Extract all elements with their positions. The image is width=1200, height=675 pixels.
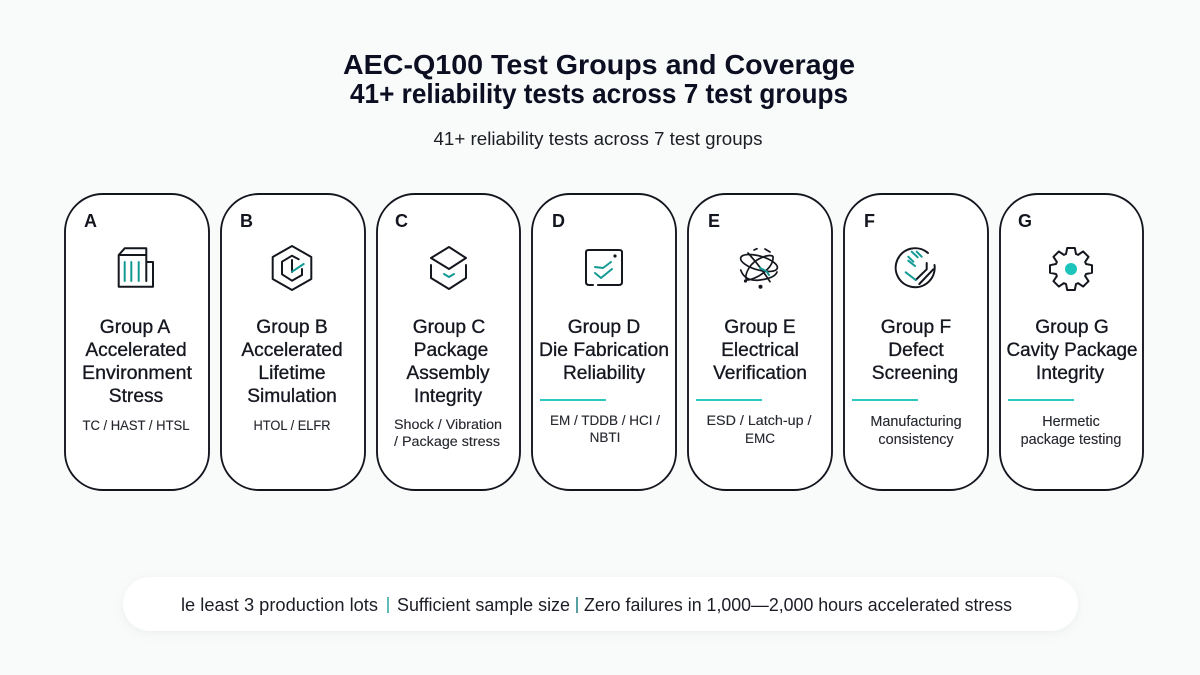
- badge letter E: E: [708, 211, 720, 231]
- heading: group B: Lifetime: [258, 363, 326, 384]
- tests: group G: [1021, 414, 1121, 448]
- title: [343, 49, 855, 109]
- tests: group D: NBTI: [590, 430, 620, 445]
- subtitle: 41+ reliability tests across 7 test groups: [434, 129, 762, 149]
- heading: group B: Simulation: [247, 386, 337, 407]
- tests: group E: EMC: [745, 431, 775, 446]
- heading: group B: Accelerated: [241, 340, 343, 361]
- panel: group G: [1000, 194, 1143, 490]
- icon: circled checks F: [896, 248, 935, 287]
- heading: group B: Group B: [256, 317, 328, 338]
- heading: group D: [539, 317, 669, 384]
- tests: group C: Shock / Vibration: [394, 417, 502, 432]
- icon: hexagon clock B: [273, 246, 311, 290]
- heading: group F: [872, 317, 958, 384]
- panel: group A: [65, 194, 209, 490]
- callout: qualification criteria: Zero failures in 1,000—2,000 hours accelerated stress: [584, 595, 1012, 615]
- callout: qualification criteria: Sufficient sample size: [397, 595, 570, 615]
- heading: group A: Accelerated: [85, 340, 187, 361]
- heading: group B: [241, 317, 343, 407]
- badge letter B: B: [240, 211, 253, 231]
- panel: group D: [532, 194, 676, 490]
- tests: group C: / Package stress: [394, 434, 500, 449]
- badge letter F: F: [864, 211, 875, 231]
- heading: group C: Assembly: [406, 363, 490, 384]
- badge letter G: G: [1018, 211, 1032, 231]
- heading: group D: Reliability: [563, 363, 645, 384]
- icon: gear G: [1050, 248, 1092, 290]
- heading: group G: [1006, 317, 1138, 384]
- heading: group C: Package: [414, 340, 488, 361]
- panel: group E: [688, 194, 832, 490]
- tests: group F: consistency: [878, 432, 954, 448]
- badge letter C: C: [395, 211, 408, 231]
- tests: group B: HTOL / ELFR: [254, 418, 331, 433]
- divider: group F: [852, 399, 918, 401]
- icon: checklist square D: [586, 250, 622, 285]
- heading: group A: Group A: [100, 317, 170, 338]
- icon: atom E: [739, 249, 779, 289]
- heading: group E: Electrical: [721, 340, 799, 361]
- tests: group A: TC / HAST / HTSL: [82, 418, 190, 433]
- heading: group A: Stress: [109, 386, 163, 407]
- heading: group E: Verification: [713, 363, 807, 384]
- tests: group D: [550, 413, 660, 445]
- divider: group E: [696, 399, 762, 401]
- heading: group A: [82, 317, 193, 407]
- heading: group F: Defect: [888, 340, 944, 361]
- tests: group G: Hermetic: [1042, 414, 1100, 430]
- heading: group E: Group E: [724, 317, 796, 338]
- heading: group G: Cavity Package: [1006, 340, 1138, 361]
- tests: group D: EM / TDDB / HCI /: [550, 413, 660, 428]
- heading: group A: Environment: [82, 363, 193, 384]
- divider: group D: [540, 399, 606, 401]
- heading: group F: Screening: [872, 363, 958, 384]
- heading: group C: Integrity: [414, 386, 483, 407]
- tests: group G: package testing: [1021, 432, 1121, 448]
- callout: qualification criteria: le least 3 production lots: [181, 595, 378, 615]
- heading: group C: Group C: [413, 317, 485, 338]
- heading: group F: Group F: [881, 317, 951, 338]
- tests: group C: [394, 417, 502, 449]
- heading: group D: Group D: [568, 317, 640, 338]
- badge letter A: A: [84, 211, 97, 231]
- panel: group F: [844, 194, 988, 490]
- icon: chip package A: [119, 248, 153, 287]
- tests: group F: [870, 414, 962, 448]
- heading: group C: [406, 317, 490, 407]
- tests: group E: [706, 413, 812, 446]
- callout: qualification criteria: [123, 577, 1078, 631]
- heading: group G: Group G: [1035, 317, 1109, 338]
- panel: group B: [221, 194, 365, 490]
- heading: group E: [713, 317, 807, 384]
- heading: group D: Die Fabrication: [539, 340, 669, 361]
- divider: group G: [1008, 399, 1074, 401]
- heading: group G: Integrity: [1036, 363, 1105, 384]
- icon: package box C: [431, 247, 466, 289]
- title: AEC-Q100 Test Groups and Coverage: [343, 49, 855, 80]
- panel: group C: [377, 194, 520, 490]
- title: 41+ reliability tests across 7 test groups: [350, 78, 848, 109]
- tests: group E: ESD / Latch-up /: [706, 413, 812, 428]
- tests: group F: Manufacturing: [870, 414, 962, 430]
- badge letter D: D: [552, 211, 565, 231]
